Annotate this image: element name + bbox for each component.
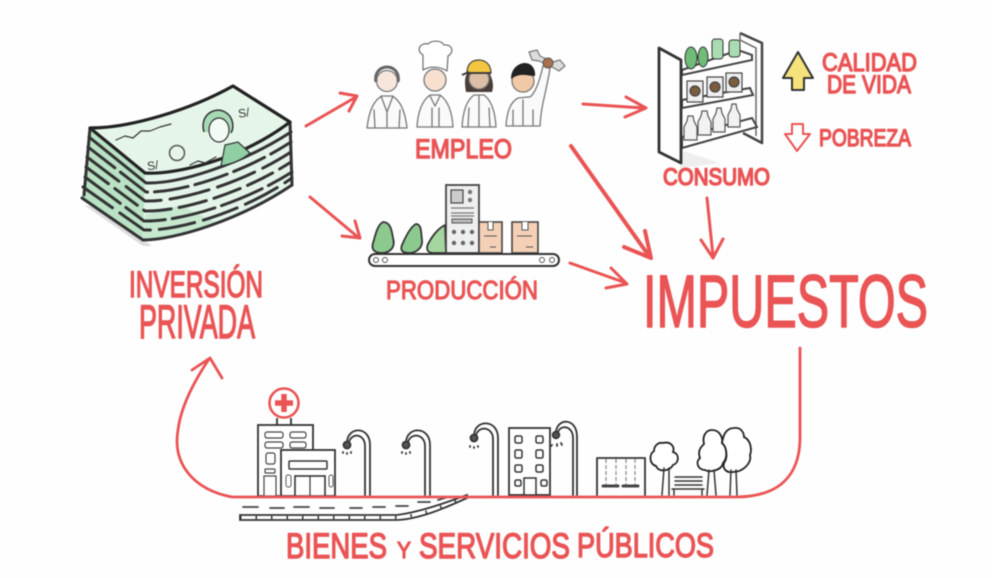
arrow: consumo to impuestos: [701, 198, 723, 258]
label: Bienes y servicios públicos: [286, 527, 714, 566]
apartment building: [509, 428, 550, 495]
arrow: producción to impuestos: [570, 263, 627, 288]
arrow: public services loop from impuestos back to inversión privada: [177, 348, 800, 497]
tree: [722, 428, 751, 495]
conveyor belt: [369, 254, 559, 266]
arrow: empleo to impuestos: [571, 146, 651, 258]
label: Producción: PRODUCCIÓN: [386, 275, 538, 305]
label: Inversión privada: PRIVADA: [139, 295, 255, 348]
label: Calidad de vida: [822, 49, 917, 99]
tree: [698, 430, 726, 495]
label: Pobreza: POBREZA: [819, 125, 911, 152]
street lamp: [343, 430, 370, 495]
avocado: [372, 222, 394, 253]
icon: stack of banknotes: S/: [237, 105, 251, 121]
shelf items: bottles: [684, 104, 740, 140]
icon: stack of banknotes: [82, 86, 292, 246]
street lamp: [402, 430, 430, 495]
box: [512, 222, 538, 253]
label: Inversión privada: [129, 264, 263, 348]
street lamp: [551, 422, 577, 495]
worker: construction: [462, 60, 496, 127]
icon: public city scene: [240, 388, 751, 520]
avocado: [427, 225, 446, 253]
street lamp: [470, 423, 498, 495]
arrow: inversión to producción: [310, 197, 360, 238]
icon: store shelf: [659, 33, 762, 168]
avocado: [401, 224, 422, 253]
shelf items: coffee bags: [687, 73, 742, 102]
park bench: [672, 477, 704, 495]
label: Bienes y servicios públicos: SERVICIOS: [419, 527, 570, 566]
shelf items: avocados and plants: [685, 39, 740, 69]
label: Inversión privada: INVERSIÓN: [129, 264, 263, 305]
label: Calidad de vida: CALIDAD: [822, 49, 917, 77]
label: Bienes y servicios públicos: PÚBLICOS: [577, 527, 714, 565]
label: Calidad de vida: DE VIDA: [827, 71, 911, 99]
label: Empleo: EMPLEO: [415, 134, 512, 164]
box: [479, 222, 502, 253]
icon: stack of banknotes: S/: [146, 158, 160, 173]
label: Bienes y servicios públicos: BIENES: [286, 527, 387, 566]
arrow: inversión to empleo: [306, 93, 357, 126]
label: Consumo: CONSUMO: [663, 164, 770, 191]
icon: portrait on banknote: [203, 110, 250, 166]
road: [240, 495, 467, 520]
hospital: [258, 388, 335, 496]
icon: production line: [369, 185, 559, 266]
machine: [446, 185, 479, 253]
arrow: empleo to consumo: [583, 97, 646, 117]
tree: [650, 443, 678, 495]
worker: mechanic with wrench: [506, 50, 565, 126]
swing set: [597, 458, 645, 495]
icon: red down arrow: [785, 124, 810, 151]
worker: scientist: [367, 67, 407, 128]
label: Bienes y servicios públicos: Y: [397, 537, 411, 563]
icon: workers group: [367, 41, 565, 128]
worker: chef: [417, 41, 453, 127]
icon: yellow up arrow: [783, 52, 813, 90]
